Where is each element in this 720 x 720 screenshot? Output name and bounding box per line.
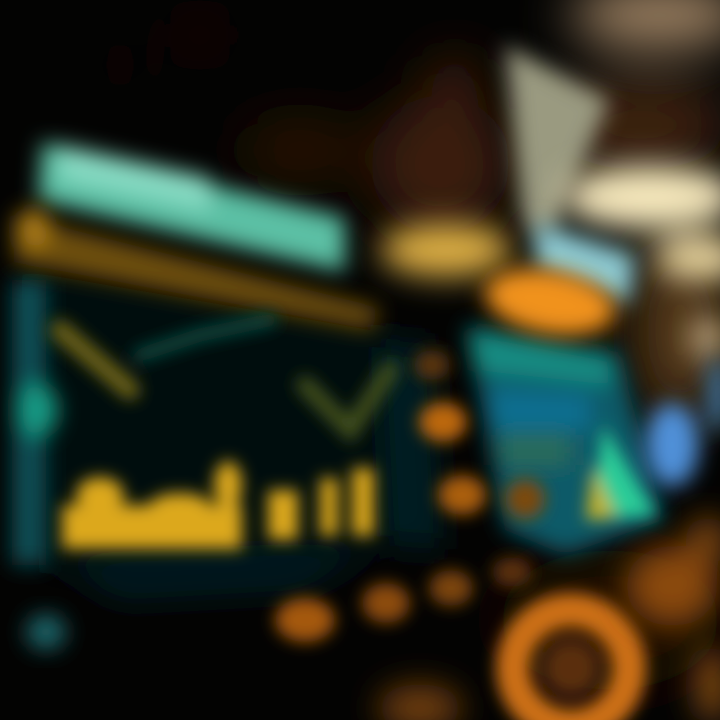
left teal edge	[12, 280, 58, 565]
hanging lamps	[380, 165, 720, 360]
gray triangular lamp shade	[505, 45, 610, 245]
yellow headline text block	[62, 461, 374, 549]
light blue screen	[535, 222, 635, 304]
right teal card	[466, 325, 664, 555]
orange dome	[479, 259, 621, 345]
orange ring	[513, 610, 629, 720]
bottom coins	[378, 516, 720, 720]
green wedge chart	[586, 425, 656, 520]
blue side shape	[645, 357, 720, 487]
orange dots	[275, 350, 545, 642]
olive band beneath banner	[14, 208, 380, 330]
chart lines inside panel	[60, 320, 390, 430]
teal dot bottom left	[26, 614, 66, 650]
teal header banner	[38, 142, 345, 272]
main dark panel	[20, 270, 440, 600]
